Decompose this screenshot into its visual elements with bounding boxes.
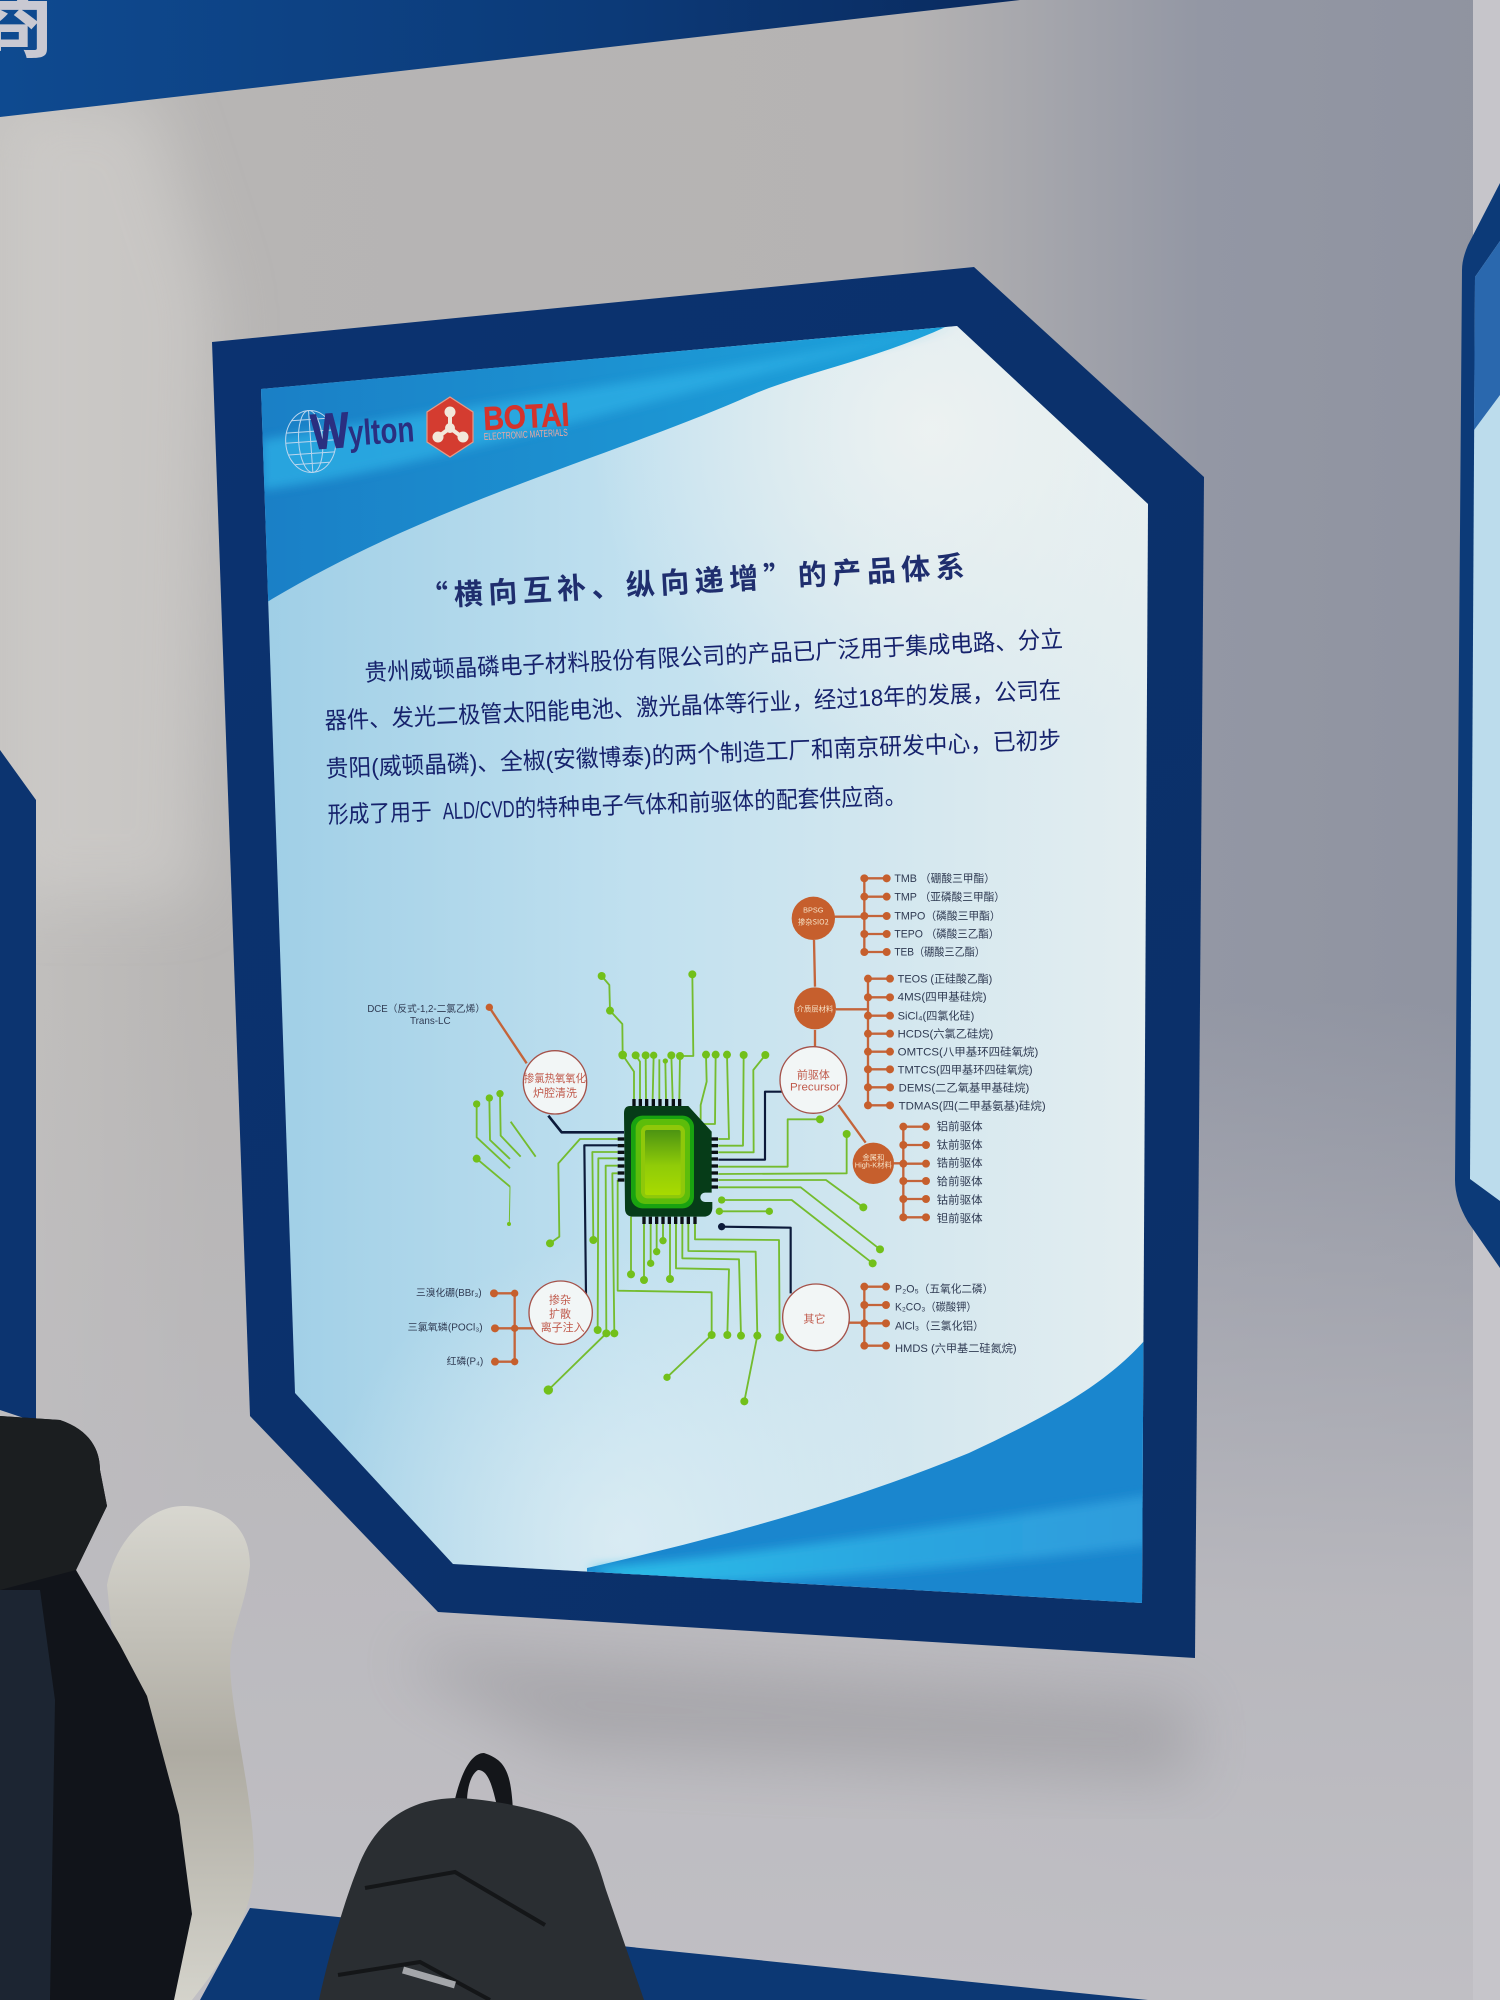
node: precursor [780,1047,847,1113]
node: precursor: 前驱体 [797,1067,830,1083]
panel: light box face [250,320,1160,1620]
labels: dielectric materials list: HCDS(六氯乙硅烷) [898,1026,993,1040]
wordmark: W [309,402,352,460]
labels: dielectric materials list: OMTCS(八甲基环四硅氧烷) [898,1044,1038,1058]
body text block [324,626,1063,828]
frame: dark blue hexagonal light box [212,267,1204,1658]
top blue sign band [0,0,1020,117]
labels: left gases: DCE（反式-1,2-二氯乙烯） [367,1003,485,1015]
node: others [783,1284,849,1351]
jacket [0,1416,192,2000]
node: BPSG doped SiO2: BPSG [803,906,824,915]
logo: Wylton: ylton [347,408,415,454]
diagram: chip and precursor product tree [367,871,1046,1405]
node: doping, diffusion, ion implantation: 扩散 [549,1305,571,1321]
labels: dielectric materials list: TMTCS(四甲基环四硅氧烷) [898,1062,1033,1076]
body text block: 的特种电子气体和前驱体的配套供应商。 [514,783,907,822]
labels: other materials list: AlCl₃（三氯化铝） [895,1319,984,1333]
chair back [107,1506,254,2000]
labels: BPSG list: TMB （硼酸三甲酯） [894,871,995,885]
icon: microchip [618,1099,718,1224]
labels: metal precursors list: 钴前驱体 [937,1192,983,1206]
node: fluorine-doped oxidation and chamber cleaning: 掺氯热氧氧化 [524,1070,586,1086]
labels: other materials list [895,1282,1017,1355]
node: doping, diffusion, ion implantation [529,1281,592,1344]
labels: metal precursors list: 铪前驱体 [937,1174,983,1188]
backpack [319,1753,644,2000]
labels: BPSG list [894,871,1005,958]
left blue column [0,750,36,1422]
labels: left gases: 红磷(P₄) [447,1356,483,1368]
labels: BPSG list: TEB（硼酸三乙酯） [894,944,985,958]
body text block: 贵州威顿晶磷电子材料股份有限公司的产品已广泛用于集成电路、分立 [364,626,1063,686]
icon: globe [284,409,338,474]
body text block: 贵阳(威顿晶磷)、全椒(安徽博泰)的两个制造工厂和南京研发中心，已初步 [325,727,1062,782]
labels: other materials list: HMDS (六甲基二硅氮烷) [895,1341,1017,1355]
body text block: 器件、发光二极管太阳能电池、激光晶体等行业，经过18年的发展，公司在 [324,677,1062,734]
node: BPSG doped SiO2: 掺杂SIO2 [798,917,829,928]
node: doping, diffusion, ion implantation: 离子注入 [541,1319,585,1335]
labels: metal precursors list: 锆前驱体 [937,1156,983,1170]
node: others: 其它 [803,1310,825,1326]
icon: red hexagon molecule [427,397,473,457]
labels: metal precursors list [937,1119,983,1225]
node: precursor: Precursor [790,1082,840,1094]
labels: dielectric materials list: TEOS (正硅酸乙酯) [898,971,992,985]
labels: dielectric materials list: 4MS(四甲基硅烷) [898,990,987,1004]
labels: dielectric materials list: SiCl₄(四氯化硅) [898,1009,974,1023]
right neighbouring panel [1455,183,1500,1268]
labels: left gases: 三溴化硼(BBr₃) [416,1287,482,1299]
labels: BPSG list: TEPO （磷酸三乙酯） [894,927,999,941]
labels: dielectric materials list: DEMS(二乙氧基甲基硅烷) [899,1081,1029,1095]
labels: left gases: 三氯氧磷(POCl₃) [408,1322,483,1334]
circuit traces [473,970,884,1405]
labels: dielectric materials list: TDMAS(四(二甲基氨基)硅烷) [899,1099,1046,1113]
node: BPSG doped SiO2 [792,897,835,940]
orange connector tree [486,874,930,1366]
node: metal and high-K materials: 金属和 [862,1152,884,1163]
logo: Botai [427,396,570,457]
labels: dielectric materials list [898,971,1046,1113]
body text block: 形成了用于 [327,799,432,828]
bottom blue swoosh [587,1340,1150,1610]
node: dielectric materials [794,987,836,1029]
labels: metal precursors list: 铝前驱体 [937,1119,983,1133]
labels: other materials list: P₂O₅（五氧化二磷） [895,1282,993,1296]
node: metal and high-K materials [853,1143,894,1184]
wordmark: BOTAI [482,396,570,437]
labels: other materials list: K₂CO₃（碳酸钾） [895,1299,977,1313]
logo: Wylton [283,397,417,474]
node: dielectric materials: 介质层材料 [797,1004,834,1015]
body text block: ALD/CVD [442,796,515,824]
labels: metal precursors list: 钛前驱体 [937,1137,983,1151]
floor blue band [200,1908,1148,2000]
tagline: ELECTRONIC MATERIALS [484,428,568,443]
node: fluorine-doped oxidation and chamber cleaning: 炉腔清洗 [533,1084,577,1100]
top blue swoosh [255,320,960,610]
node: metal and high-K materials: High-K材料 [855,1161,893,1170]
labels: BPSG list: TMPO（磷酸三甲酯） [894,908,1001,922]
labels: left gases: Trans-LC [410,1016,451,1027]
labels: metal precursors list: 钽前驱体 [937,1211,983,1225]
node: fluorine-doped oxidation and chamber cleaning [523,1051,587,1114]
labels: left gases [367,1003,485,1368]
title: “横向互补、纵向递增”的产品体系 [418,544,966,616]
node: doping, diffusion, ion implantation: 掺杂 [549,1292,571,1308]
labels: BPSG list: TMP （亚磷酸三甲酯） [894,889,1005,903]
